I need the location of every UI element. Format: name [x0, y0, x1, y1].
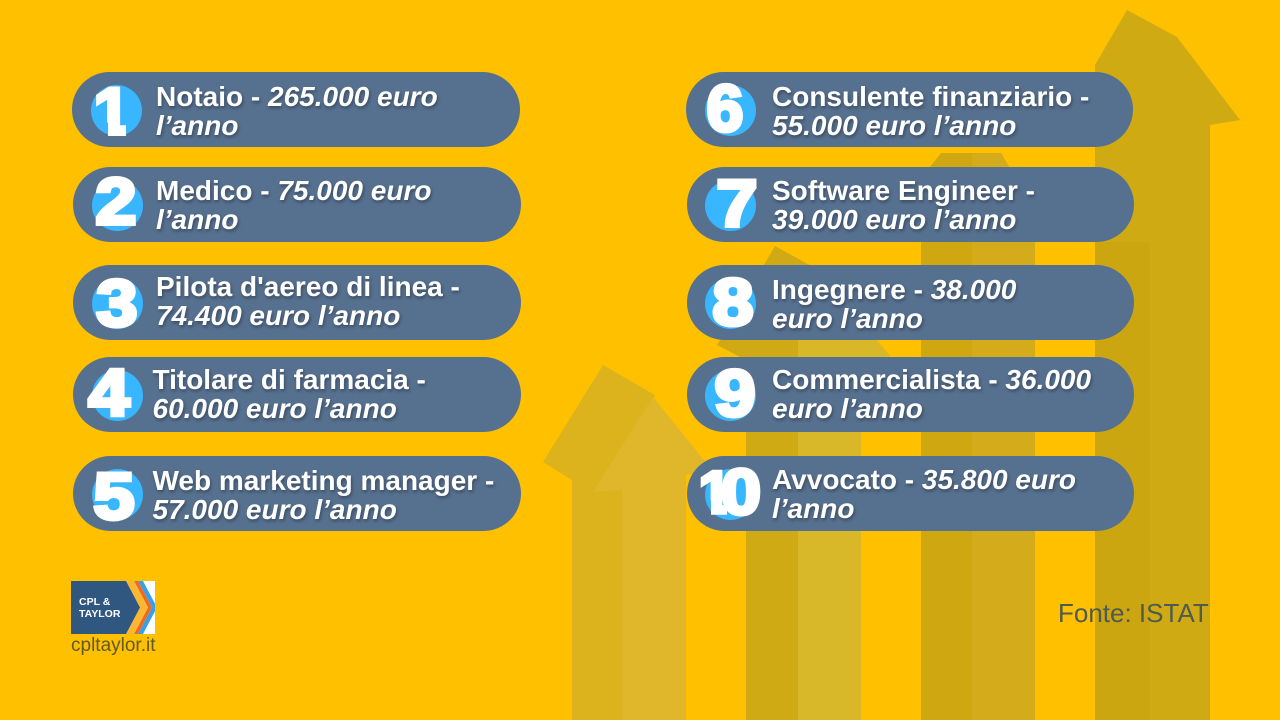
item 7: [687, 167, 1134, 242]
label 2: Medico - 75.000 euro: [156, 175, 431, 206]
label 3: Pilota d'aereo di linea -: [156, 271, 460, 302]
arrow 1: [543, 365, 712, 720]
label 5: Web marketing manager -: [152, 465, 494, 496]
number 1: 1: [94, 74, 130, 148]
label 10: [772, 464, 1078, 524]
number 7: 7: [716, 166, 758, 240]
item 3: [73, 265, 521, 340]
item 8: [687, 265, 1134, 340]
label 7: [772, 175, 1036, 235]
logo: [71, 581, 155, 634]
label 8: Ingegnere - 38.000: [772, 274, 1016, 305]
label 3: 74.400 euro l’anno: [156, 300, 400, 331]
logo caption: cpltaylor.it: [71, 635, 155, 656]
number 2: 2: [95, 164, 137, 238]
item 10: [687, 456, 1134, 531]
item 9: [687, 357, 1134, 432]
number 10: 0: [721, 456, 761, 528]
label 10: Avvocato - 35.800 euro: [772, 464, 1076, 495]
arrow 4: [1095, 10, 1240, 720]
label 6: Consulente finanziario -: [772, 81, 1089, 112]
label 8: euro l’anno: [772, 303, 923, 334]
label 1: Notaio - 265.000 euro: [156, 81, 438, 112]
label 4: [152, 364, 427, 424]
label 4: 60.000 euro l’anno: [152, 393, 397, 424]
label 6: 55.000 euro l’anno: [772, 110, 1016, 141]
number 9: 9: [714, 356, 756, 430]
label 9: euro l’anno: [772, 393, 923, 424]
label 3: [156, 271, 461, 331]
number 10: 1: [698, 458, 732, 526]
label 9: Commercialista - 36.000: [772, 364, 1091, 395]
label 4: Titolare di farmacia -: [152, 364, 426, 395]
logo: TAYLOR: [79, 608, 121, 620]
label 7: 39.000 euro l’anno: [772, 204, 1016, 235]
label 6: [772, 81, 1090, 141]
item 6: [686, 72, 1133, 147]
label 5: 57.000 euro l’anno: [152, 494, 397, 525]
logo: CPL &: [79, 596, 111, 608]
source: Fonte: ISTAT: [1058, 598, 1209, 628]
number 10: [700, 456, 761, 528]
item 4: [73, 357, 521, 432]
label 9: [772, 364, 1094, 424]
item 2: [73, 167, 521, 242]
label 10: l’anno: [772, 493, 854, 524]
arrow 3: [921, 153, 1035, 720]
label 2: l’anno: [156, 204, 238, 235]
label 1: l’anno: [156, 110, 238, 141]
number 5: 5: [93, 458, 135, 532]
number 3: 3: [96, 266, 138, 340]
number 4: 4: [88, 354, 130, 428]
item 1: [72, 72, 520, 147]
item 5: [73, 456, 521, 531]
label 8: [772, 274, 1018, 334]
label 1: [156, 81, 439, 141]
number 6: 6: [707, 70, 743, 144]
label 2: [156, 175, 433, 235]
label 5: [152, 465, 496, 525]
label 7: Software Engineer -: [772, 175, 1035, 206]
number 8: 8: [712, 265, 754, 339]
arrow 2: [717, 246, 890, 720]
